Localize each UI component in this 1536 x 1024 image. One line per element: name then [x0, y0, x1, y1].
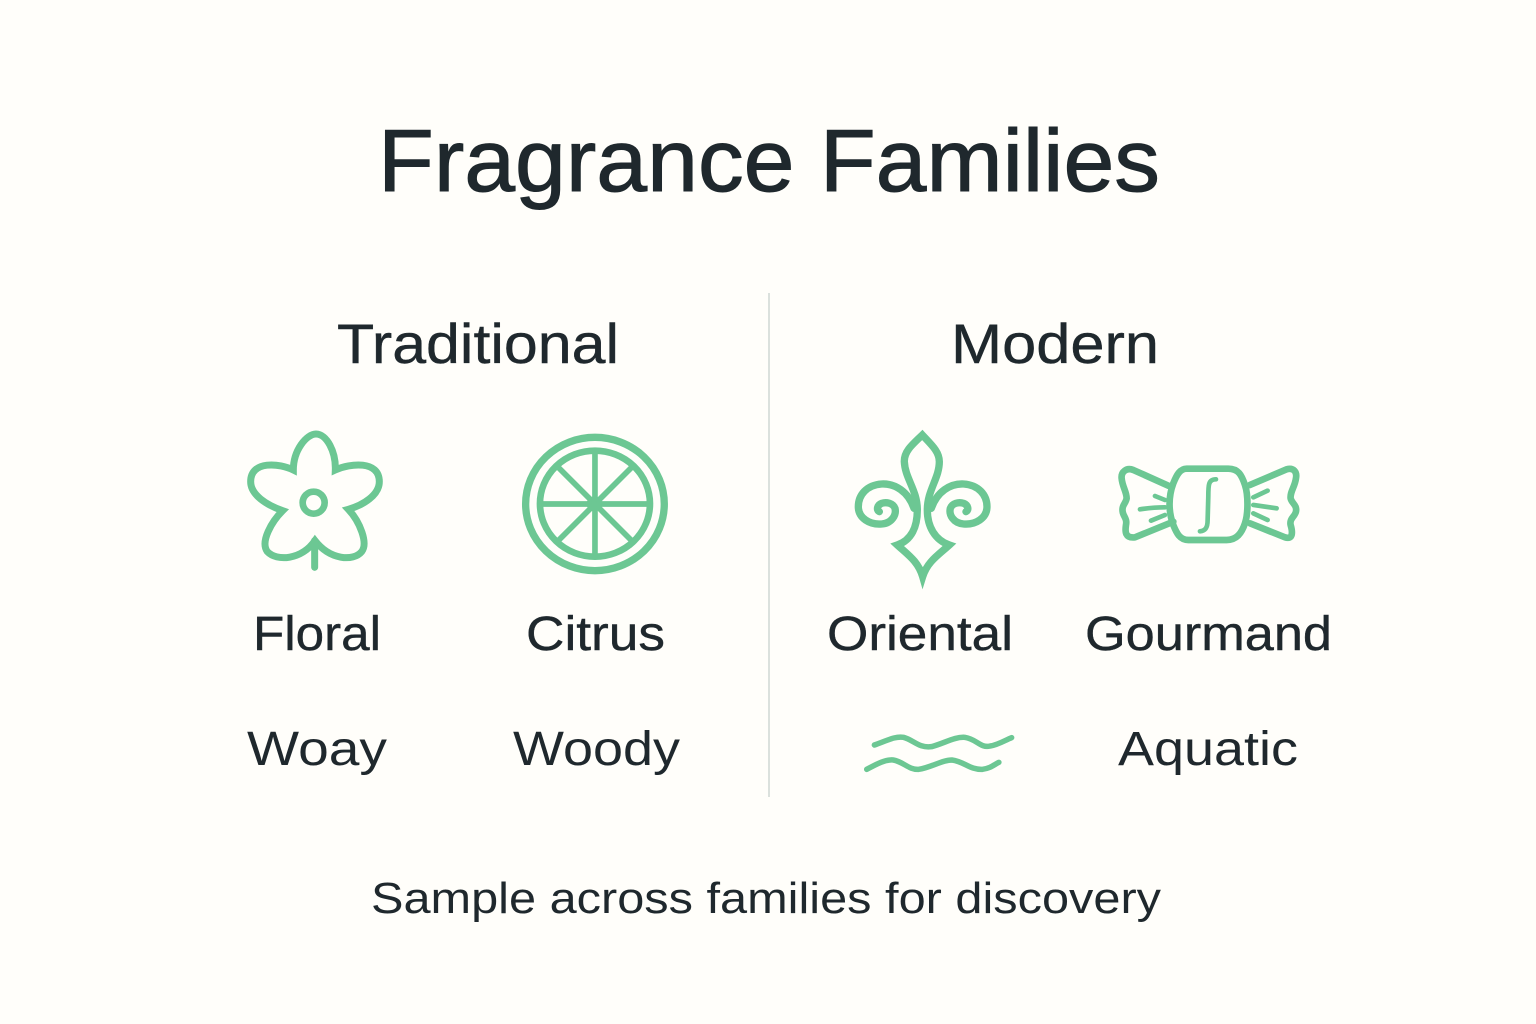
icon: aquatic waves — [867, 737, 1012, 769]
label: woay: Woay — [247, 723, 387, 776]
icon: floral flower — [251, 434, 379, 567]
label: gourmand: Gourmand — [1085, 608, 1332, 661]
label: floral: Floral — [253, 608, 381, 661]
heading: modern: Modern — [951, 312, 1159, 375]
icon: gourmand candy — [1122, 469, 1296, 540]
label: woody: Woody — [513, 723, 680, 776]
label: citrus: Citrus — [526, 608, 665, 661]
icon: oriental fleur-de-lis — [858, 435, 987, 577]
title: Fragrance Families — [378, 111, 1160, 210]
label: aquatic: Aquatic — [1118, 723, 1298, 776]
label: oriental: Oriental — [827, 608, 1013, 661]
icon: citrus slice — [526, 437, 664, 571]
panel: modern — [827, 312, 1332, 776]
heading: traditional: Traditional — [337, 312, 619, 375]
footer note: Sample across families for discovery — [371, 874, 1161, 923]
panel: traditional — [247, 312, 680, 776]
